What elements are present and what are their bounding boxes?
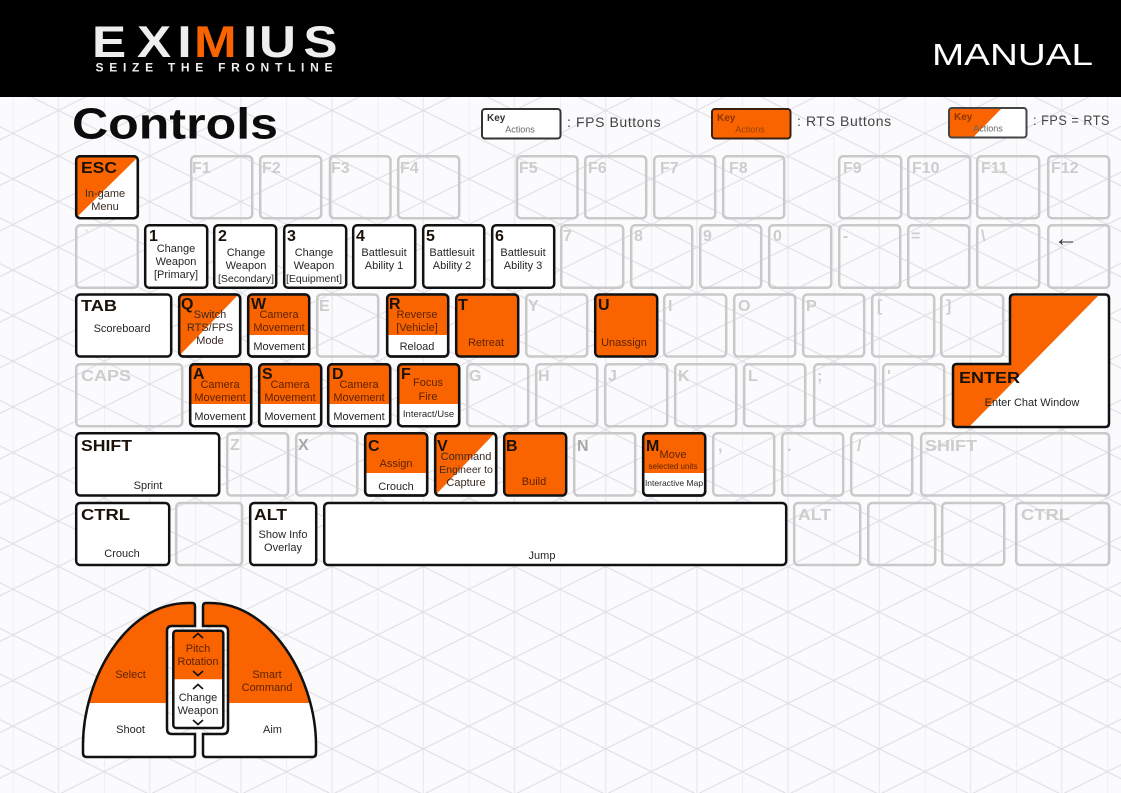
key: E inactive xyxy=(317,294,378,356)
key: W: Movement xyxy=(253,322,305,334)
legend: RTS buttons: : RTS Buttons xyxy=(797,113,892,129)
key: TAB: TAB xyxy=(81,298,117,315)
key: A: A xyxy=(193,366,205,383)
key: W: Camera xyxy=(259,309,299,321)
key: 1: 1 xyxy=(149,228,158,245)
key: M: Interactive Map xyxy=(645,478,703,488)
key: ENTER: Enter Chat Window xyxy=(985,397,1079,409)
number row, inactive keys: 7 xyxy=(563,228,572,245)
key: 1: [Primary] xyxy=(154,269,198,281)
key: R xyxy=(387,294,448,356)
key: Q xyxy=(179,294,240,356)
function keys, inactive: F4 xyxy=(400,160,419,177)
keys: Z and X inactive: X xyxy=(298,437,309,454)
key: 3: [Equipment] xyxy=(286,273,342,285)
key: S: Movement xyxy=(264,411,316,423)
key: V: V xyxy=(437,438,448,455)
home row letters, inactive: G xyxy=(469,368,481,385)
key: 3: 3 xyxy=(287,228,296,245)
function keys, inactive: F5 xyxy=(519,160,538,177)
key: A: Movement xyxy=(194,411,246,423)
key: W xyxy=(248,294,309,356)
function keys, inactive: F11 xyxy=(981,160,1008,177)
key: V: Command xyxy=(441,451,491,463)
key: ALT: ALT xyxy=(254,507,287,524)
mouse right button: Aim xyxy=(263,724,282,736)
bottom row letters, inactive: . xyxy=(787,438,791,455)
key: Space: Jump xyxy=(529,550,555,562)
key: 3: Weapon xyxy=(294,260,334,272)
key: R: Reload xyxy=(400,341,434,353)
key: B: B xyxy=(506,438,518,455)
key: F: Focus xyxy=(413,377,443,389)
bottom row letters, inactive: SHIFT xyxy=(925,438,977,455)
key: D: Camera xyxy=(339,379,379,391)
mouse right button: Smart xyxy=(252,669,282,681)
key: E inactive: E xyxy=(319,298,330,315)
key: D xyxy=(328,364,390,426)
key: 5: Battlesuit xyxy=(429,247,475,259)
number row, inactive keys: - xyxy=(843,228,848,245)
key: CTRL: CTRL xyxy=(81,507,130,524)
key: 2 xyxy=(214,225,276,288)
legend: FPS = RTS: Actions xyxy=(973,124,1003,134)
key: ESC: In-game xyxy=(85,188,125,200)
key: D: Movement xyxy=(333,392,385,404)
key: 3 xyxy=(284,225,346,288)
key: U xyxy=(595,294,657,356)
top row letters, inactive: P xyxy=(806,298,817,315)
legend: RTS buttons xyxy=(712,109,892,138)
keyboard xyxy=(76,156,1109,565)
key: Q: RTS/FPS xyxy=(187,322,233,334)
key: V: Capture xyxy=(446,477,486,489)
number row, inactive keys: \ xyxy=(981,228,986,245)
key: 1: Change xyxy=(157,243,195,255)
home row letters, inactive: L xyxy=(748,368,758,385)
key: SHIFT: Sprint xyxy=(134,480,162,492)
key: CTRL: Crouch xyxy=(104,548,140,560)
right modifiers, inactive: ALT xyxy=(798,507,831,524)
function keys, inactive xyxy=(191,156,1109,218)
key: S: Movement xyxy=(264,392,316,404)
key: 2: Weapon xyxy=(226,260,266,272)
function keys, inactive: F12 xyxy=(1051,160,1079,177)
key: 6: Battlesuit xyxy=(500,247,546,259)
key: ALT: Overlay xyxy=(264,542,302,554)
key: F xyxy=(398,364,459,426)
number row, inactive keys: ` xyxy=(85,229,89,241)
right modifiers, inactive xyxy=(794,503,1109,565)
key: Q: Switch xyxy=(194,309,226,321)
bottom row letters, inactive: / xyxy=(857,438,862,455)
home row letters, inactive: H xyxy=(538,368,550,385)
number row, inactive keys xyxy=(76,225,1109,288)
top row letters, inactive: [ xyxy=(877,298,883,315)
number row, inactive keys: 0 xyxy=(773,228,782,245)
key: ALT: Show Info xyxy=(259,529,307,541)
header band xyxy=(0,0,1121,97)
top row letters, inactive xyxy=(664,294,1003,356)
logo: Eximius: EXIMIUS xyxy=(92,18,338,67)
key: A xyxy=(190,364,251,426)
key: T: T xyxy=(458,297,468,314)
number row, inactive keys: ← xyxy=(1054,225,1078,252)
keys: Z and X inactive xyxy=(227,433,357,496)
keys: Z and X inactive: Z xyxy=(230,437,240,454)
key: B xyxy=(504,433,566,496)
key: F: F xyxy=(401,366,411,383)
key: ENTER: ENTER xyxy=(959,370,1020,387)
key: Y inactive xyxy=(526,294,587,356)
key: N inactive xyxy=(574,433,635,496)
key: S: S xyxy=(262,366,273,383)
key: 1 xyxy=(145,225,207,288)
number row, inactive keys: = xyxy=(911,228,920,245)
number row, inactive keys: 9 xyxy=(703,228,712,245)
key: 5: Ability 2 xyxy=(433,260,471,272)
key: 2: 2 xyxy=(218,228,227,245)
mouse right button: Command xyxy=(242,682,292,694)
manual label: MANUAL xyxy=(932,37,1093,72)
key: ENTER xyxy=(953,294,1109,427)
key: 6 xyxy=(492,225,554,288)
key: 2: Change xyxy=(227,247,265,259)
key: R: R xyxy=(389,296,401,313)
top row letters, inactive: ] xyxy=(946,298,951,315)
key: W: W xyxy=(251,296,267,313)
key: 5 xyxy=(423,225,484,288)
key: R: Reverse xyxy=(397,309,437,321)
logo: Eximius: SEIZE THE FRONTLINE xyxy=(96,60,332,74)
title: Controls xyxy=(72,100,278,148)
legend xyxy=(482,108,1110,138)
legend: FPS buttons xyxy=(482,109,661,138)
number row, inactive keys: 8 xyxy=(634,228,643,245)
key: TAB xyxy=(76,294,171,356)
key: CAPS inactive: CAPS xyxy=(81,368,131,385)
key: B: Build xyxy=(522,476,546,488)
key: A: Camera xyxy=(200,379,240,391)
key: C xyxy=(365,433,427,496)
key: T xyxy=(456,294,518,356)
key: M: Move xyxy=(660,449,686,461)
key: M xyxy=(643,433,705,496)
key: 6: Ability 3 xyxy=(504,260,542,272)
legend: FPS buttons: : FPS Buttons xyxy=(567,114,661,130)
mouse left button: Select xyxy=(115,669,146,681)
function keys, inactive: F3 xyxy=(331,160,350,177)
key: U: U xyxy=(598,297,610,314)
key: V xyxy=(435,433,496,496)
key: T: Retreat xyxy=(468,337,504,349)
mouse left button: Shoot xyxy=(116,724,145,736)
key: F: Interact/Use xyxy=(403,409,454,420)
key: Space xyxy=(324,503,786,565)
mouse diagram xyxy=(78,600,320,757)
legend: RTS buttons: Key xyxy=(717,113,736,124)
top row letters, inactive: I xyxy=(668,298,672,315)
function keys, inactive: F8 xyxy=(729,160,748,177)
home row letters, inactive: ' xyxy=(887,368,891,385)
mouse left button xyxy=(78,600,198,757)
key: F: Fire xyxy=(419,391,437,403)
legend: FPS = RTS: Key xyxy=(954,112,973,123)
key: ALT xyxy=(250,503,316,565)
key: 4: Battlesuit xyxy=(361,247,407,259)
key: SHIFT xyxy=(76,433,219,496)
key: R: [Vehicle] xyxy=(396,322,438,334)
home row letters, inactive xyxy=(467,364,944,426)
function keys, inactive: F1 xyxy=(192,160,211,177)
function keys, inactive: F7 xyxy=(660,160,679,177)
mouse right button xyxy=(200,600,320,757)
function keys, inactive: F10 xyxy=(912,160,940,177)
key: 4: 4 xyxy=(356,228,365,245)
key: M: selected units xyxy=(649,462,697,471)
bottom row letters, inactive: , xyxy=(718,438,722,455)
key: 6: 6 xyxy=(495,228,504,245)
right modifiers, inactive: CTRL xyxy=(1021,507,1070,524)
mouse wheel xyxy=(173,631,223,728)
key: 2: [Secondary] xyxy=(218,273,274,285)
key: 1: Weapon xyxy=(156,256,196,268)
key: S: Camera xyxy=(270,379,310,391)
home row letters, inactive: K xyxy=(678,368,690,385)
key: A: Movement xyxy=(194,392,246,404)
mouse wheel: Weapon xyxy=(178,705,218,717)
key: 4: Ability 1 xyxy=(365,260,403,272)
legend: FPS buttons: Actions xyxy=(505,124,535,134)
key: CTRL xyxy=(76,503,169,565)
key: Y inactive: Y xyxy=(528,298,539,315)
legend: FPS = RTS: : FPS = RTS xyxy=(1033,112,1110,128)
mouse wheel: Change xyxy=(179,692,217,704)
key: ESC: ESC xyxy=(81,160,117,177)
legend: RTS buttons: Actions xyxy=(735,124,765,134)
key: N inactive: N xyxy=(577,438,589,455)
key: SHIFT: SHIFT xyxy=(81,438,132,455)
chevrons xyxy=(193,634,203,724)
key: left Win inactive xyxy=(176,503,242,565)
key: D: D xyxy=(332,366,344,383)
function keys, inactive: F6 xyxy=(588,160,607,177)
legend: FPS buttons: Key xyxy=(487,113,506,124)
key: W: Movement xyxy=(253,341,305,353)
legend: FPS = RTS xyxy=(949,108,1110,138)
key: V: Engineer to xyxy=(439,464,493,476)
mouse wheel: Pitch xyxy=(186,643,210,655)
key: D: Movement xyxy=(333,411,385,423)
function keys, inactive: F9 xyxy=(843,160,862,177)
key: C: Crouch xyxy=(378,481,414,493)
mouse wheel: Rotation xyxy=(178,656,218,668)
home row letters, inactive: ; xyxy=(817,368,822,385)
key: ESC xyxy=(76,156,138,218)
home row letters, inactive: J xyxy=(608,368,617,385)
key: Q: Mode xyxy=(196,335,224,347)
key: Q: Q xyxy=(181,296,193,313)
key: S xyxy=(259,364,321,426)
top row letters, inactive: O xyxy=(738,298,750,315)
key: U: Unassign xyxy=(601,337,647,349)
key: C: C xyxy=(368,438,380,455)
key: TAB: Scoreboard xyxy=(94,323,150,335)
key: 3: Change xyxy=(295,247,333,259)
bottom row letters, inactive xyxy=(713,433,1109,496)
key: ESC: Menu xyxy=(91,201,119,213)
key: C: Assign xyxy=(379,458,413,470)
key: CAPS inactive xyxy=(76,364,182,426)
key: M: M xyxy=(646,438,659,455)
key: 4 xyxy=(353,225,415,288)
function keys, inactive: F2 xyxy=(262,160,281,177)
key: 5: 5 xyxy=(426,228,435,245)
